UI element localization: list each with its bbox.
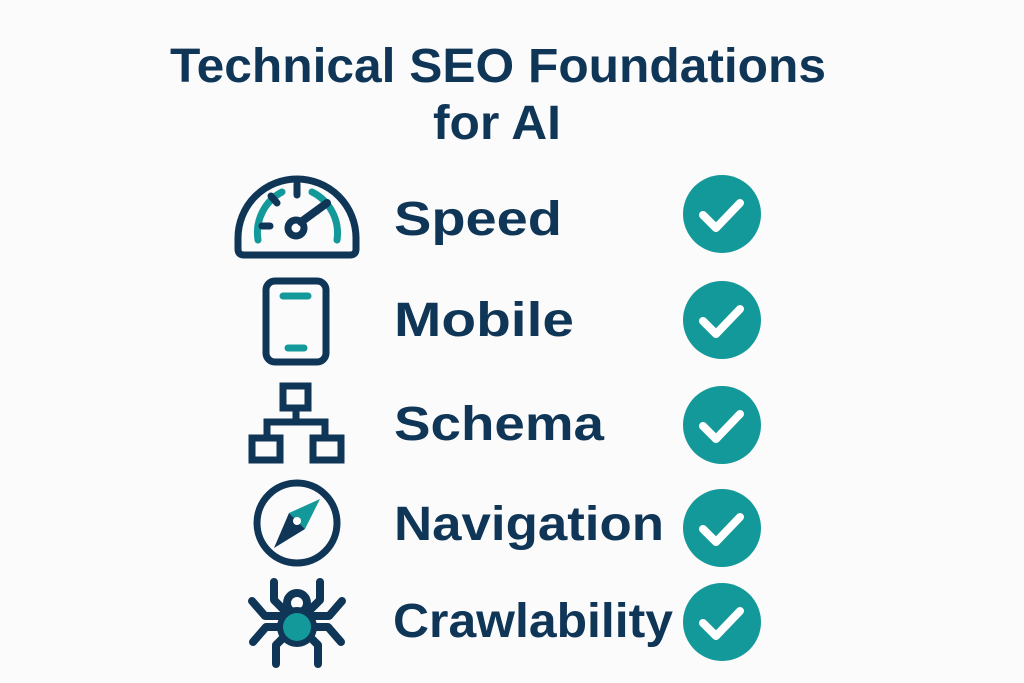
check 4: [683, 489, 761, 567]
title: [170, 40, 826, 150]
check 3: [683, 386, 761, 464]
label: schema: Schema: [394, 398, 604, 451]
icon: spider: [252, 582, 342, 664]
label: speed: Speed: [394, 193, 562, 246]
icon: schema: [252, 386, 341, 460]
check 1: [683, 175, 761, 253]
icon: compass: [257, 483, 337, 563]
check 5: [683, 583, 761, 661]
label: mobile: Mobile: [394, 294, 574, 347]
icon: mobile: [266, 281, 326, 362]
check 2: [683, 281, 761, 359]
title: for AI: [433, 97, 561, 150]
icon: speedometer: [238, 179, 356, 255]
label: crawlability: Crawlability: [393, 595, 673, 648]
label: navigation: Navigation: [394, 498, 664, 551]
title: Technical SEO Foundations: [170, 40, 826, 93]
